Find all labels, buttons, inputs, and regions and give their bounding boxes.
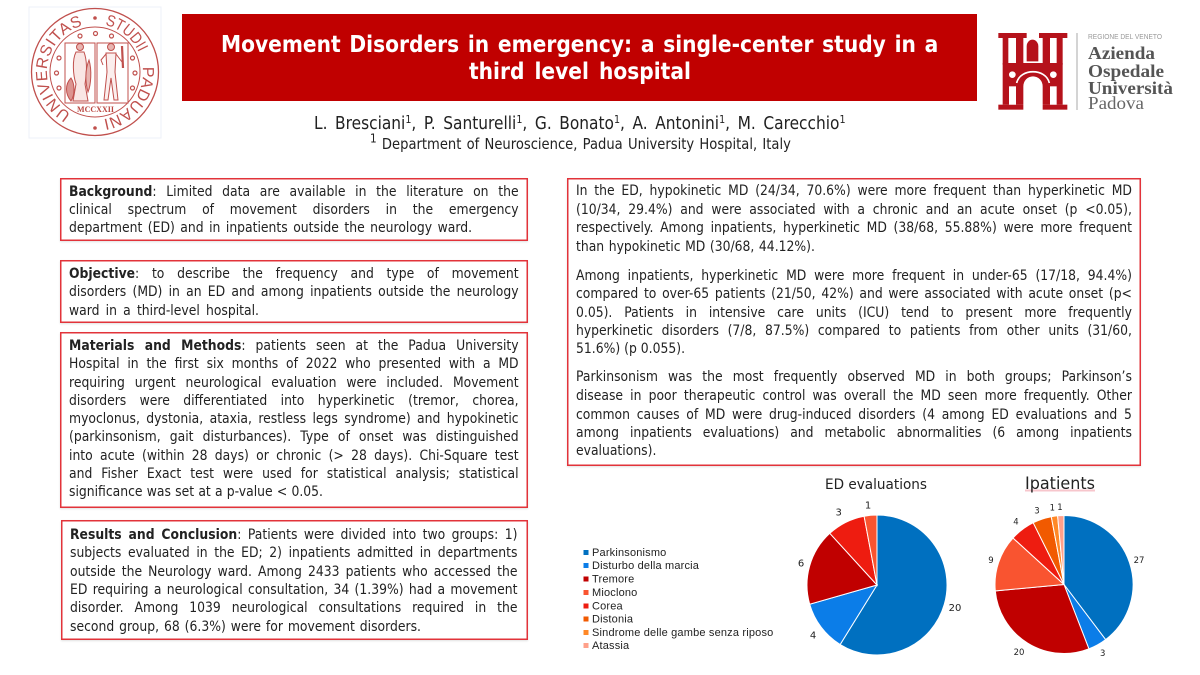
panel: materials and methods: Hospital in the first six months of 2022 who presented with a MD: [69, 356, 519, 372]
pie labels: ED evaluations: [798, 500, 961, 642]
panel: objective: ward in a third-level hospital.: [69, 302, 259, 318]
logo: hospital wordmark: Ospedale: [1088, 61, 1164, 81]
panel: findings: disease in poor therapeutic control was overall the MD seen more frequently. Other: [576, 388, 1132, 404]
affiliation: 1 Department of Neuroscience, Padua University Hospital, Italy: [370, 131, 791, 153]
legend: Parkinsonismo: [592, 547, 666, 559]
legend: Disturbo della marcia: [592, 560, 700, 572]
logo: hospital wordmark: [1088, 34, 1173, 113]
legend: Sindrome delle gambe senza riposo: [592, 627, 773, 639]
panel: findings: In the ED, hypokinetic MD (24/34, 70.6%) were more frequent than hyperkinetic MD: [576, 183, 1132, 199]
logo: University of Padua seal: [28, 6, 162, 138]
logo: University of Padua seal: STUDII: [106, 15, 148, 52]
logo: hospital wordmark: Università: [1088, 78, 1173, 98]
panel: objective: Objective: to describe the frequency and type of movement: [69, 266, 519, 282]
panel: materials and methods: myoclonus, dystonia, ataxia, restless legs syndrome) and hypokinetic: [69, 411, 519, 427]
legend: Mioclono: [592, 587, 637, 599]
panel: results and conclusion: outside the Neurology ward. Among 2433 patients who accessed the: [70, 564, 517, 580]
pie labels: Inpatients: 3: [1100, 649, 1105, 659]
panel: findings: than hypokinetic MD (30/68, 44.12%).: [576, 238, 815, 254]
panel: materials and methods: disorders were differentiated into hyperkinetic (tremor, chorea,: [69, 392, 519, 408]
legend: Tremore: [592, 574, 634, 586]
panel: background: Background: Limited data are available in the literature on the: [69, 184, 519, 200]
panel: results and conclusion: Results and Conclusion: Patients were divided into two groups: 1): [70, 527, 517, 543]
panel: results and conclusion: subjects evaluated in the ED; 2) inpatients admitted in departments: [70, 545, 517, 561]
legend: [584, 547, 773, 652]
panel: results and conclusion: [61, 520, 528, 640]
panel: materials and methods: Materials and Methods: patients seen at the Padua University: [69, 338, 519, 354]
logo: hospital wordmark: Azienda: [1088, 43, 1155, 63]
pie labels: Inpatients: 9: [988, 556, 994, 566]
panel: findings: 51.6%) (p 0.055).: [576, 341, 685, 357]
panel: findings: hyperkinetic disorders (7/8, 87.5%) compared to patients from other units (31/60,: [576, 323, 1132, 339]
panel: objective: [60, 260, 528, 323]
pie labels: ED evaluations: 20: [949, 603, 961, 614]
panel: objective: disorders (MD) in an ED and among inpatients outside the neurology: [69, 284, 519, 300]
panel: background: clinical spectrum of movement disorders in the emergency: [69, 202, 519, 218]
pie chart: Inpatients: [995, 516, 1133, 653]
header banner: title: [182, 14, 977, 101]
right figure: [101, 44, 123, 100]
pie labels: Inpatients: 20: [1014, 648, 1024, 658]
panel: materials and methods: into acute (within 28 days) or chronic (> 28 days). Chi-Square test: [69, 448, 519, 464]
logo: University of Padua seal: MCCXXII: [77, 105, 114, 114]
logo: hospital wordmark: REGIONE DEL VENETO: [1088, 34, 1163, 41]
header banner: title: third level hospital: [469, 56, 691, 84]
panel: materials and methods: (parkinsonism, gait disturbances). Type of onset was distinguished: [69, 429, 519, 445]
panel: background: [60, 178, 528, 241]
pie labels: Inpatients: 1: [1050, 504, 1055, 514]
panel: results and conclusion: ED requiring a neurological consultation, 34 (1.39%) had a movement: [70, 582, 517, 598]
chart title: Ipatients: Ipatients: [1025, 474, 1095, 493]
panel: materials and methods: and Fisher Exact test were used for statistical analysis; statistical: [69, 466, 519, 482]
panel: findings: compared to over-65 patients (21/50, 42%) and were associated with acute onset (p<: [576, 286, 1132, 302]
legend: Corea: [592, 600, 624, 612]
panel: materials and methods: [60, 332, 528, 508]
logo: hospital building mark: [998, 33, 1068, 110]
logo: University of Padua seal: PADUANI: [104, 68, 154, 130]
pie labels: Inpatients: 1: [1057, 503, 1063, 513]
left figure: [66, 44, 91, 101]
panel: findings: [567, 178, 1141, 466]
panel: background: department (ED) and in inpatients outside the neurology ward.: [69, 220, 472, 236]
pie labels: Inpatients: 3: [1034, 507, 1040, 517]
panel: results and conclusion: second group, 68 (6.3%) were for movement disorders.: [70, 619, 421, 635]
pie chart: ED evaluations: [807, 515, 947, 655]
pie labels: Inpatients: [988, 503, 1144, 659]
pie labels: ED evaluations: 6: [798, 558, 804, 570]
legend: Distonia: [592, 614, 634, 626]
chart title: ED evaluations: ED evaluations: [825, 477, 927, 493]
panel: findings: (10/34, 29.4%) and were associated with a chronic and an acute onset (p <0.05),: [576, 202, 1132, 218]
panel: materials and methods: requiring urgent neurological evaluation were included. Movement: [69, 374, 519, 390]
pie labels: ED evaluations: 3: [836, 508, 842, 518]
pie labels: Inpatients: 4: [1013, 518, 1019, 528]
panel: findings: respectively. Among inpatients, hyperkinetic MD (38/68, 55.88%) were more frequent: [576, 220, 1132, 236]
panel: findings: Parkinsonism was the most frequently observed MD in both groups; Parkinson’s: [576, 369, 1132, 385]
logo: University of Padua seal: UNIVERSITAS: [36, 16, 81, 122]
panel: materials and methods: significance was set at a p-value < 0.05.: [69, 484, 323, 500]
divider line of hospital logo: [1076, 33, 1078, 110]
pie labels: ED evaluations: 4: [810, 630, 816, 642]
panel: findings: evaluations).: [576, 443, 656, 459]
pie labels: Inpatients: 27: [1134, 556, 1144, 566]
panel: findings: Among inpatients, hyperkinetic MD were more frequent in under-65 (17/18, 94.4%): [576, 268, 1132, 284]
logo: hospital wordmark: Padova: [1088, 93, 1144, 113]
pie labels: ED evaluations: 1: [865, 500, 871, 512]
panel: findings: common causes of MD were drug-induced disorders (4 among ED evaluations and 5: [576, 406, 1132, 422]
panel: findings: 0.05). Patients in intensive care units (ICU) tend to present more frequently: [576, 305, 1132, 321]
legend: Atassia: [592, 640, 630, 652]
authors: L. Bresciani1, P. Santurelli1, G. Bonato1, A. Antonini1, M. Carecchio1: [314, 113, 846, 134]
panel: results and conclusion: disorder. Among 1039 neurological consultations required in the: [70, 600, 517, 616]
panel: findings: among inpatients evaluations) and metabolic abnormalities (6 among inpatients: [576, 424, 1132, 440]
header banner: title: Movement Disorders in emergency: a single-center study in a: [221, 30, 938, 58]
